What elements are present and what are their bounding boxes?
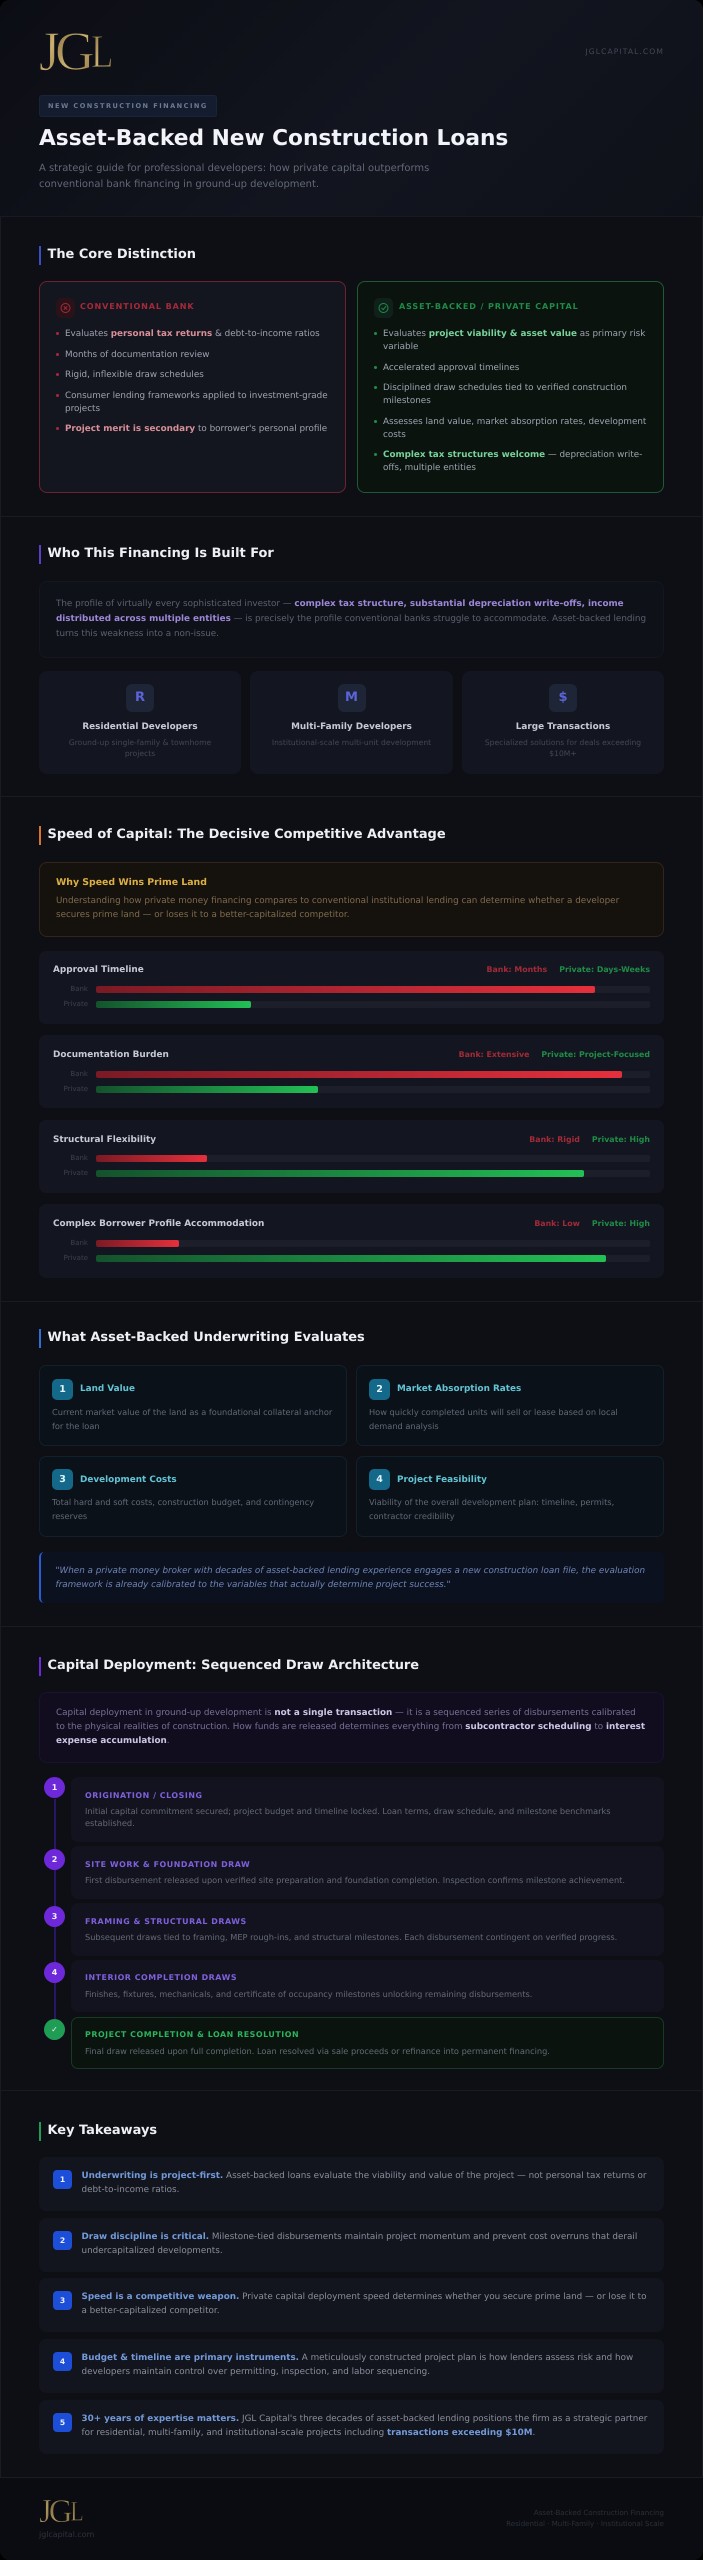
icon: dollar [549,684,577,712]
logo: JGL monogram [39,33,113,73]
panel: asset-backed private capital [357,281,664,493]
header [0,0,703,217]
card: development costs: Total hard and soft costs, construction budget, and contingency [52,1497,314,1507]
card: market absorption rates: Market Absorption Rates [397,1384,521,1394]
footer website: jglcapital.com [39,2530,94,2539]
pull quote: "When a private money broker with decades of asset-backed lending experience engages a new construction loan file, the evaluation [56,1566,645,1576]
footer descriptor [506,2508,664,2528]
card: residential developers [39,671,241,774]
section: key takeaways [0,2090,703,2477]
card: land value: Land Value [80,1384,135,1394]
step 3: framing and structural draws: 3 [52,1912,57,1921]
card: market absorption rates: 2 [376,1384,383,1395]
step 5: project completion and loan resolution [44,2017,664,2069]
icon: check [44,2019,65,2040]
card: development costs [39,1456,346,1537]
takeaway 1: debt-to-income ratios. [82,2185,179,2195]
card: project feasibility: 4 [376,1474,383,1485]
step 4: interior completion draws: Finishes, fixtures, mechanicals, and certificate of occupancy milestones unlocking remaining disbursements. [85,1989,532,1999]
card description: $10M+ [549,749,577,758]
takeaway 4 [39,2339,664,2392]
step 2: site work and foundation draw: SITE WORK & FOUNDATION DRAW [85,1860,250,1869]
takeaway 3: Speed is a competitive weapon. Private capital deployment speed determines whether you secure prime land — or lose it to [82,2292,646,2302]
panel: conventional bank: projects [65,404,100,414]
bar chart: complex borrower profile accommodation: Private [64,1254,88,1262]
step 2: site work and foundation draw: 2 [52,1855,57,1864]
takeaway 3: a better-capitalized competitor. [82,2306,219,2316]
subtitle [39,163,429,190]
bar chart: structural flexibility [39,1120,664,1193]
title: Asset-Backed New Construction Loans [39,126,508,151]
card: market absorption rates: demand analysis [369,1420,439,1430]
callout text [56,896,620,920]
takeaway 1 [39,2157,664,2210]
takeaway 1: 1 [60,2175,65,2184]
icon: M [338,684,366,712]
section: the core distinction [39,246,664,493]
card title: Multi-Family Developers [291,722,412,732]
step 2: site work and foundation draw [44,1846,664,1899]
heading: Speed of Capital: The Decisive Competitive Advantage [48,827,446,842]
step 5: project completion and loan resolution: PROJECT COMPLETION & LOAN RESOLUTION [85,2030,299,2039]
takeaway 1: Underwriting is project-first. Asset-backed loans evaluate the viability and value of the project — not personal tax returns or [82,2171,647,2181]
subtitle: A strategic guide for professional developers: how private capital outperforms [39,163,429,174]
subtitle: conventional bank financing in ground-up development. [39,179,319,190]
card: market absorption rates: How quickly completed units will sell or lease based on local [369,1407,618,1417]
icon: check: ✓ [51,2025,58,2034]
panel: asset-backed private capital: Disciplined draw schedules tied to verified construction [383,383,627,393]
card: development costs: 3 [59,1474,66,1485]
callout text: secures prime land — or loses it to a better-capitalized competitor. [56,910,349,920]
step 5: project completion and loan resolution: Final draw released upon full completion. Loan resolved via sale proceeds or refinance into permanent financing. [85,2046,550,2056]
step 3: framing and structural draws: FRAMING & STRUCTURAL DRAWS [85,1917,247,1926]
step 4: interior completion draws [44,1960,664,2012]
card: project feasibility: contractor credibility [369,1510,455,1520]
step 3: framing and structural draws: Subsequent draws tied to framing, MEP rough-ins, and structural milestones. Each disbursement contingent on verified progress. [85,1932,617,1942]
bar chart: approval timeline: Private [64,1000,88,1008]
bar chart: complex borrower profile accommodation: Bank [70,1239,88,1247]
callout: why speed wins prime land [39,862,664,937]
panel: asset-backed private capital: costs [383,430,406,440]
panel: asset-backed private capital: Assesses land value, market absorption rates, development [383,416,646,426]
card: project feasibility [356,1456,664,1537]
card description: Institutional-scale multi-unit development [272,738,431,747]
pull quote: framework is already calibrated to the variables that actually determine project success." [56,1580,451,1590]
callout text: Understanding how private money financing compares to conventional institutional lending can determine whether a developer [56,896,619,906]
step 3: framing and structural draws [44,1903,664,1956]
bar chart: approval timeline [39,951,664,1024]
card: development costs: Development Costs [80,1474,177,1484]
bar chart: approval timeline: Bank [70,985,88,993]
card description [485,738,641,758]
card: large transactions [462,671,664,774]
pull quote [39,1552,664,1603]
list items [374,329,646,352]
card: project feasibility: Viability of the overall development plan: timeline, permits, [369,1497,614,1507]
takeaway 4: Budget & timeline are primary instruments. A meticulously constructed project plan is how lenders assess risk and how [82,2353,633,2363]
callout title: Why Speed Wins Prime Land [56,877,207,888]
bar chart: structural flexibility: Bank: Rigid Private: High [529,1134,650,1144]
panel: conventional bank: Consumer lending frameworks applied to investment-grade [65,390,328,400]
bar chart: complex borrower profile accommodation [39,1204,664,1278]
takeaway 2: undercapitalized developments. [82,2246,223,2256]
step 1: origination / closing [44,1777,664,1842]
step 2: site work and foundation draw: First disbursement released upon verified site preparation and foundation completion. Inspection confirms milestone achievement. [85,1875,625,1885]
list items: Evaluates personal tax returns & debt-to-income ratios [65,329,320,339]
footer descriptor: Asset-Backed Construction Financing [534,2508,664,2517]
panel label: CONVENTIONAL BANK [80,302,194,311]
panel: conventional bank: Months of documentation review [65,350,209,360]
takeaway 2 [39,2218,664,2272]
intro text box: turns this weakness into a non-issue. [56,628,219,638]
card description: projects [125,749,155,758]
icon: cross circle [56,298,75,318]
intro text box: Capital deployment in ground-up development is not a single transaction — it is a sequenced series of disbursements calibrated [56,1708,636,1718]
heading: What Asset-Backed Underwriting Evaluates [48,1330,365,1345]
panel: asset-backed private capital: offs, multiple entities [383,463,476,473]
panel: asset-backed private capital: Complex tax structures welcome — depreciation write- [383,450,642,460]
panel: conventional bank [39,281,346,493]
intro text box: The profile of virtually every sophisticated investor — complex tax structure, substantial depreciation write-offs, income [56,598,624,608]
card: land value [39,1365,346,1446]
bar chart: complex borrower profile accommodation: Bank: Low Private: High [534,1219,650,1228]
bar chart: structural flexibility: Private [64,1169,88,1177]
section: underwriting evaluates [0,1301,703,1626]
bar chart: documentation burden: Bank: Extensive Private: Project-Focused [459,1050,650,1059]
bar chart: documentation burden: Bank [70,1070,88,1078]
intro text box: expense accumulation. [56,1736,170,1746]
card: development costs: reserves [52,1510,87,1520]
panel: conventional bank: Project merit is secondary to borrower's personal profile [65,424,327,434]
website label: JGLCAPITAL.COM [585,47,664,56]
panel: asset-backed private capital: Accelerated approval timelines [383,362,519,372]
panel label: ASSET-BACKED / PRIVATE CAPITAL [399,302,579,311]
step 4: interior completion draws: 4 [52,1968,57,1977]
step 1: origination / closing: established. [85,1818,135,1828]
card: land value: 1 [59,1384,66,1395]
category tag: NEW CONSTRUCTION FINANCING [48,102,208,110]
list items: variable [383,342,418,352]
step 1: origination / closing: Initial capital commitment secured; project budget and timeline locked. Loan terms, draw schedule, and milestone benchmarks [85,1806,611,1816]
bar chart: structural flexibility: Structural Flexibility [53,1134,156,1144]
list items: Evaluates project viability & asset value as primary risk [383,329,645,339]
step 1: origination / closing: 1 [52,1783,57,1792]
bar chart: complex borrower profile accommodation: Complex Borrower Profile Accommodation [53,1219,264,1229]
bar chart: approval timeline: Bank: Months Private: Days-Weeks [486,965,650,974]
intro text box [39,1692,664,1763]
section: capital deployment [0,1626,703,2090]
bar chart: documentation burden: Documentation Burden [53,1050,169,1060]
section: who this financing is built for [0,516,703,796]
footer [0,2477,703,2560]
step 1: origination / closing: ORIGINATION / CLOSING [85,1791,203,1800]
footer descriptor: Residential · Multi-Family · Institutional Scale [506,2519,664,2528]
icon: check circle [374,298,393,318]
card description: Specialized solutions for deals exceeding [485,738,641,747]
card: land value: Current market value of the land as a foundational collateral anchor [52,1407,332,1417]
card: market absorption rates [356,1365,664,1446]
heading: Capital Deployment: Sequenced Draw Architecture [48,1658,419,1673]
card: multi-family developers [250,671,453,774]
heading: The Core Distinction [48,247,196,262]
takeaway 2: 2 [60,2236,65,2245]
icon: dollar: $ [558,690,568,705]
footer logo [39,2500,84,2524]
heading: Key Takeaways [48,2123,157,2138]
takeaway 3: 3 [60,2296,65,2305]
card: land value: for the loan [52,1420,100,1430]
takeaway 5: for residential, multi-family, and institutional-scale projects including transactions exceeding $10M. [82,2428,535,2438]
intro text box: to the physical realities of construction. How funds are released determines everything from subcontractor scheduling to interest [56,1722,645,1732]
icon: R [126,684,154,712]
bar chart: approval timeline: Approval Timeline [53,965,144,975]
step 4: interior completion draws: INTERIOR COMPLETION DRAWS [85,1973,237,1982]
takeaway 4: 4 [60,2357,65,2366]
section: speed of capital [0,796,703,1301]
card description [69,738,211,758]
takeaway 4: developers maintain control over permitting, inspection, and labor sequencing. [82,2367,430,2377]
takeaway 5: 30+ years of expertise matters. JGL Capital's three decades of asset-backed lending positions the firm as a strategic partner [82,2414,647,2424]
panel: conventional bank: Rigid, inflexible draw schedules [65,370,204,380]
takeaway 5: 5 [60,2418,65,2427]
takeaway 3 [39,2278,664,2332]
panel: asset-backed private capital: milestones [383,396,431,406]
icon: M: M [345,690,358,705]
bar chart: structural flexibility: Bank [70,1154,88,1162]
heading: Who This Financing Is Built For [48,546,274,561]
card title: Large Transactions [516,722,610,732]
takeaway 5 [39,2400,664,2454]
icon: R: R [135,690,145,705]
bar chart: documentation burden: Private [64,1085,88,1093]
takeaway 2: Draw discipline is critical. Milestone-tied disbursements maintain project momentum and prevent cost overruns that derail [82,2232,637,2242]
card description: Ground-up single-family & townhome [69,738,211,747]
intro text box [39,581,664,658]
category tag [39,95,217,117]
card: project feasibility: Project Feasibility [397,1474,487,1484]
card title: Residential Developers [82,722,198,732]
intro text box: distributed across multiple entities — is precisely the profile conventional banks struggle to accommodate. Asset-backed lending [56,614,646,624]
bar chart: documentation burden [39,1035,664,1108]
